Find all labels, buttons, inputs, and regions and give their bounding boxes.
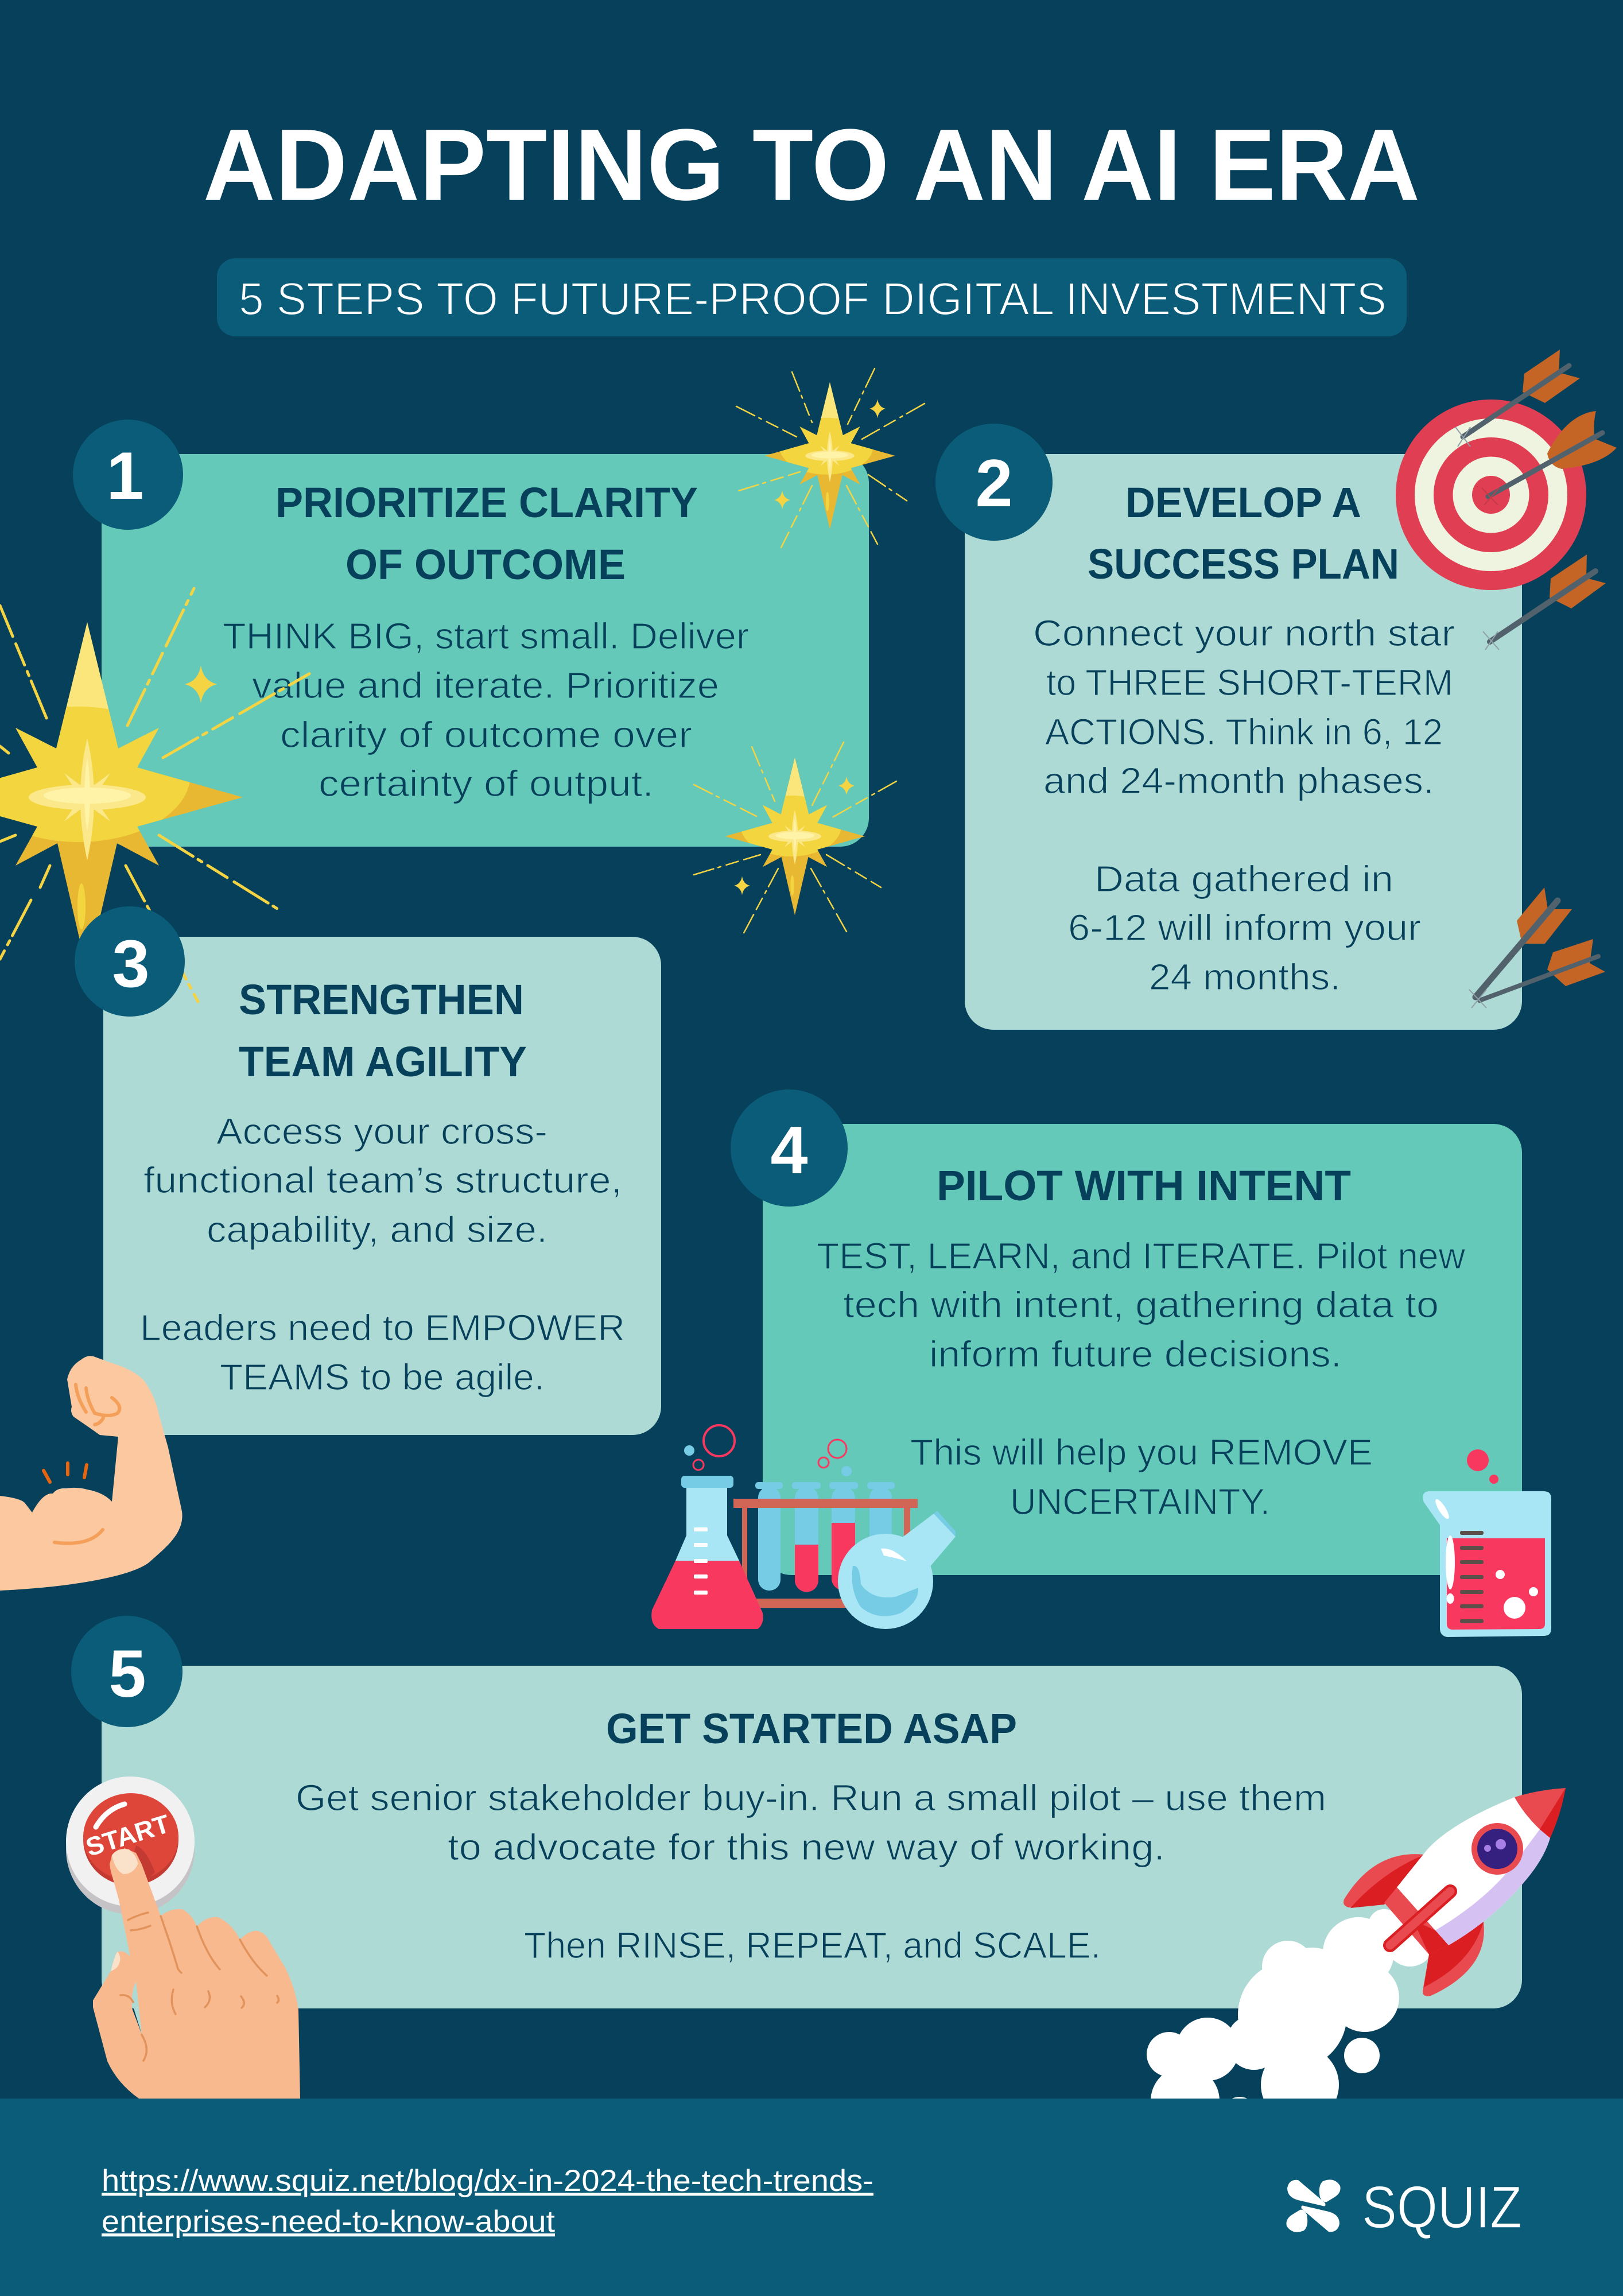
step 2 body: 24 months. <box>1149 956 1341 998</box>
panel: step 5 <box>102 1666 1522 2008</box>
step 5 body: Then RINSE, REPEAT, and SCALE. <box>524 1925 1101 1966</box>
step 4 body: UNCERTAINTY. <box>1010 1481 1270 1522</box>
subtitle pill <box>217 258 1407 336</box>
panel: step 2 <box>965 454 1522 1030</box>
step 1 body <box>223 615 749 804</box>
step 3 body: capability, and size. <box>207 1209 548 1250</box>
badge 5 <box>71 1616 183 1727</box>
arrow below target <box>1483 554 1606 650</box>
logo: SQUIZ <box>1286 2174 1522 2241</box>
step 2 body: ACTIONS. Think in 6, 12 <box>1045 711 1443 753</box>
step 1 heading <box>275 479 698 588</box>
step 4 body: This will help you REMOVE <box>910 1432 1373 1473</box>
icon: large star with sparkle lines <box>0 588 311 1002</box>
smoke <box>1147 1909 1434 2135</box>
step 3 body <box>140 1111 625 1398</box>
step 4 body: tech with intent, gathering data to <box>843 1284 1439 1325</box>
pair of arrows lower right <box>1469 887 1605 1008</box>
round flask <box>838 1511 956 1629</box>
step 1 body: THINK BIG, start small. Deliver <box>223 615 749 657</box>
step 2 body: 6-12 will inform your <box>1068 907 1421 948</box>
step 1 heading: OF OUTCOME <box>345 541 626 588</box>
step 2 body: Data gathered in <box>1094 858 1393 899</box>
source link: https://www.squiz.net/blog/dx-in-2024-the-tech-trends- <box>102 2164 873 2198</box>
test tube rack <box>733 1482 918 1608</box>
source link: enterprises-need-to-know-about <box>102 2205 555 2239</box>
rocket fins <box>1344 1854 1424 1907</box>
rocket body <box>1397 1797 1550 1945</box>
conical flask <box>651 1476 763 1629</box>
panel: step 3 <box>103 937 661 1435</box>
step 3 body: functional team’s structure, <box>143 1159 622 1201</box>
icon: beaker <box>1423 1449 1551 1637</box>
step 2 body: and 24-month phases. <box>1043 760 1434 801</box>
step 2 heading <box>1088 479 1399 588</box>
badge 1: 1 <box>106 438 144 513</box>
step 5 body: Get senior stakeholder buy-in. Run a small pilot – use them <box>296 1777 1326 1818</box>
step 4 body: TEST, LEARN, and ITERATE. Pilot new <box>817 1235 1466 1277</box>
source link <box>102 2164 873 2239</box>
icon: small star top right of step 1 <box>736 369 925 548</box>
step 3 body: TEAMS to be agile. <box>220 1356 545 1398</box>
panel: step 4 <box>763 1124 1522 1575</box>
step 3 body: Leaders need to EMPOWER <box>140 1307 625 1348</box>
logo: SQUIZ: SQUIZ <box>1362 2174 1522 2241</box>
step 1 body: value and iterate. Prioritize <box>252 665 719 706</box>
rocket window <box>1471 1823 1523 1875</box>
icon: small star bottom right of step 1 <box>694 742 896 936</box>
step 3 heading <box>239 976 527 1085</box>
button <box>66 1777 195 1914</box>
icon: lab glassware <box>651 1425 956 1629</box>
badge 1 <box>73 420 183 530</box>
subtitle pill: 5 STEPS TO FUTURE-PROOF DIGITAL INVESTMENTS <box>239 273 1387 324</box>
badge 2 <box>935 424 1053 541</box>
bubbles <box>684 1425 852 1476</box>
step 1 body: clarity of outcome over <box>280 714 692 755</box>
step 2 heading: DEVELOP A <box>1125 479 1361 526</box>
badge 4 <box>731 1089 848 1207</box>
icon: target with arrows <box>1396 350 1617 1008</box>
step 1 body: certainty of output. <box>319 763 654 804</box>
badge 3: 3 <box>112 926 150 1001</box>
title: ADAPTING TO AN AI ERA <box>203 108 1420 222</box>
step 3 heading: STRENGTHEN <box>239 976 524 1023</box>
icon: rocket with smoke <box>1147 1788 1566 2135</box>
step 5 heading: GET STARTED ASAP <box>606 1705 1017 1752</box>
step 3 body: Access your cross- <box>216 1111 548 1152</box>
footer band <box>0 2099 1623 2296</box>
arrow in outer ring <box>1455 350 1580 447</box>
icon: flexed arm <box>0 1356 183 1591</box>
badge 3 <box>75 906 185 1017</box>
step 1 heading: PRIORITIZE CLARITY <box>275 479 698 526</box>
step 2 heading: SUCCESS PLAN <box>1088 540 1399 588</box>
button: START <box>82 1809 173 1862</box>
step 3 heading: TEAM AGILITY <box>239 1038 527 1085</box>
icon: start button and hand <box>66 1777 300 2099</box>
step 2 body: to THREE SHORT-TERM <box>1046 662 1453 703</box>
panel: step 1 <box>102 454 869 847</box>
arrow in bullseye <box>1482 411 1617 505</box>
step 4 heading: PILOT WITH INTENT <box>937 1162 1351 1209</box>
step 5 body: to advocate for this new way of working. <box>448 1826 1165 1868</box>
step 4 body: inform future decisions. <box>929 1333 1342 1375</box>
step 2 body <box>1033 612 1455 998</box>
badge 2: 2 <box>975 445 1013 521</box>
step 5 body <box>296 1777 1326 1966</box>
step 4 body <box>817 1235 1466 1522</box>
hand <box>93 1848 300 2099</box>
badge 4: 4 <box>770 1112 808 1188</box>
badge 5: 5 <box>108 1636 146 1711</box>
step 2 body: Connect your north star <box>1033 612 1455 654</box>
